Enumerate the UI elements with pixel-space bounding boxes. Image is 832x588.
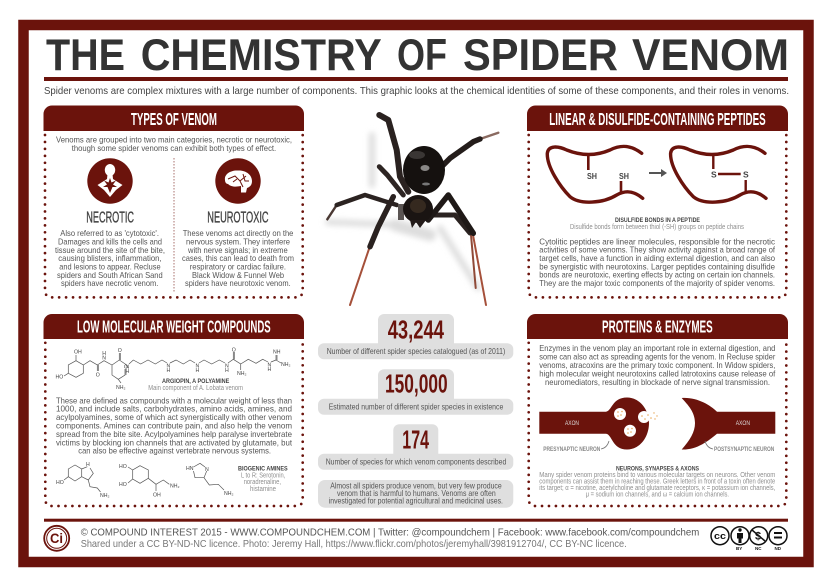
- caption: argiopin: ARGIOPIN, A POLYAMINE: [162, 378, 230, 385]
- callout: venom harm note: investigated for potential agricultural and medicinal uses.: [329, 496, 503, 506]
- credits: © COMPOUND INTEREST 2015 - WWW.COMPOUNDCHEM.COM | Twitter: @compoundchem | Facebook: www.facebook.com/compoundchem: [81, 527, 699, 538]
- necrotic column: causing blisters, inflammation,: [58, 253, 162, 263]
- icon: creative commons badges: ND: [774, 546, 782, 551]
- icon: creative commons badges: BY: [736, 546, 742, 551]
- stat: 43,244: [318, 314, 513, 359]
- neurotoxic column: Black Widow & Funnel Web: [192, 270, 284, 280]
- callout: venom harm note: [318, 480, 513, 508]
- caption: neurons, synapses and axons: [539, 466, 776, 498]
- icon: creative commons badges: $: [755, 530, 761, 542]
- caption: biogenic amines: L to R: Serotonin,: [241, 473, 285, 480]
- body text: low molecular weight: can also be effective against vertebrate nervous systems.: [78, 446, 271, 456]
- neurotoxic column: with nerve signals; in extreme: [187, 245, 288, 255]
- intro text: types: Venoms are grouped into two main categories, necrotic or neurotoxic,: [56, 134, 292, 144]
- neurotoxic column: spiders have neurotoxic venom.: [185, 278, 291, 288]
- chemical structure: histamine: NH₂: [224, 491, 234, 497]
- caption: neurons, synapses and axons: its target; α = nicotine, acetylcholine and glutamate receptors, κ = potassium ion channels,: [539, 485, 775, 492]
- caption: disulfide bonds: [570, 217, 744, 231]
- caption: argiopin: [148, 378, 243, 392]
- body text: proteins: Enzymes in the venom play an important role in external digestion, and: [539, 343, 776, 353]
- diagram: peptide with disulfide bond: [671, 146, 766, 202]
- chemical structure: argiopin: NH₂: [281, 362, 291, 368]
- stat: 174: [318, 424, 513, 470]
- neurotoxic column: respiratory or cardiac failure.: [190, 262, 286, 272]
- chemical structure: argiopin: O: [96, 372, 100, 378]
- diagram: linear peptide with SH groups: SH: [587, 171, 597, 181]
- necrotic column: [55, 210, 165, 288]
- body text: peptides: be synergistic with neurotoxins. Larger peptides containing disulfide: [539, 261, 775, 271]
- panel: low molecular weight compounds: [44, 314, 304, 506]
- necrotic column: tissue around the site of the bite,: [55, 245, 165, 255]
- chemical structure: argiopin: N: [166, 364, 170, 370]
- body text: proteins: [539, 343, 776, 387]
- chemical structure: noradrenaline: [119, 464, 180, 498]
- heading: types of venom: TYPES OF VENOM: [131, 109, 217, 129]
- chemical structure: argiopin: N: [268, 362, 272, 368]
- body text: peptides: Cytolitic peptides are linear molecules, responsible for the necrotic: [539, 236, 776, 246]
- neurotoxic column: NEUROTOXIC: [207, 210, 269, 227]
- icon: creative commons badges: [711, 527, 787, 551]
- body text: low molecular weight: These are defined as compounds with a molecular weight of less than: [56, 395, 292, 405]
- stat: 150,000: [318, 369, 513, 415]
- caption: biogenic amines: [238, 466, 288, 493]
- intro text: types: though some spider venoms can exhibit both types of effect.: [72, 143, 276, 153]
- body text: peptides: bonds are neurotoxic, exerting effects by acting on certain ion channels.: [539, 270, 775, 280]
- body text: low molecular weight: victims by blocking ion channels that are activated by glutamate, but: [56, 437, 293, 447]
- neurotoxic column: [182, 210, 294, 288]
- body text: peptides: They are the major toxic components of the majority of spider venoms.: [539, 278, 775, 288]
- chemical structure: histamine: HN: [186, 466, 194, 472]
- stat: 150,000: Estimated number of different spider species in existence: [329, 402, 504, 411]
- body text: low molecular weight: 1000, and include salts, carbohydrates, amino acids, amines, and: [56, 404, 292, 414]
- caption: neurons, synapses and axons: μ = sodium ion channels, and ω = calcium ion channels.: [586, 492, 729, 498]
- intro text: Spider venoms are complex mixtures with a large number of components. This graphic looks at the chemical identities of some of these components, and their roles in venoms.: [44, 86, 789, 97]
- callout: venom harm note: Almost all spiders produce venom, but very few produce: [330, 482, 502, 490]
- neurotoxic column: nervous system. They interfere: [186, 236, 290, 246]
- diagram: linear peptide with SH groups: [547, 146, 643, 202]
- title: CHEMISTRY: [141, 31, 382, 80]
- stat: 43,244: 43,244: [388, 316, 445, 344]
- chemical structure: serotonin: [56, 462, 110, 499]
- chemical structure: histamine: N: [205, 467, 209, 473]
- body text: low molecular weight: components. Amines can contribute pain, and also help the venom: [56, 421, 292, 431]
- stat: 43,244: Number of different spider species catalogued (as of 2011): [327, 347, 506, 356]
- diagram: presynaptic neuron: [539, 398, 658, 453]
- body text: proteins: high molecular weight neurotoxins called latrotoxins cause release of: [539, 368, 776, 378]
- necrotic column: Also referred to as 'cytotoxic'.: [60, 228, 159, 238]
- caption: biogenic amines: histamine: [250, 486, 276, 493]
- icon: necrotic body: [87, 158, 133, 204]
- chemical structure: serotonin: NH₂: [100, 493, 110, 499]
- icon: Ci logo: Ci: [50, 530, 63, 546]
- callout: venom harm note: venom that is harmful to humans. Venoms are often: [337, 489, 496, 498]
- body text: peptides: activities of some venoms. They show activity against a broad range of: [539, 245, 776, 255]
- chemical structure: argiopin: O: [232, 348, 236, 354]
- chemical structure: argiopin: H: [225, 368, 229, 374]
- diagram: peptide with disulfide bond: S: [743, 170, 749, 180]
- necrotic column: spiders and South African Sand: [57, 270, 163, 280]
- icon: creative commons badges: NC: [755, 546, 762, 551]
- title: SPIDER: [463, 31, 618, 80]
- title: [46, 31, 789, 80]
- caption: neurons, synapses and axons: Many spider venom proteins bind to various molecular targets on neurons. Other venom: [539, 472, 776, 479]
- chemical structure: noradrenaline: HO: [119, 482, 127, 488]
- chemical structure: serotonin: HO: [56, 480, 64, 486]
- credits: [81, 527, 699, 550]
- spider photo: [327, 115, 498, 305]
- chemical structure: noradrenaline: OH: [153, 492, 161, 498]
- diagram: presynaptic neuron: AXON: [565, 421, 579, 427]
- chemical structure: argiopin: N: [225, 364, 229, 370]
- panel: proteins and enzymes: [527, 314, 788, 506]
- body text: low molecular weight: acylpolyamines, some of which act synergistically with other venom: [56, 412, 292, 422]
- caption: neurons, synapses and axons: NEURONS, SYNAPSES & AXONS: [616, 466, 699, 472]
- title: VENOM: [632, 31, 789, 80]
- body text: proteins: venoms, atracoxins are the primary toxic component. In Widow spiders,: [539, 360, 775, 370]
- footer: [44, 519, 788, 551]
- chemical structure: argiopin: N: [126, 364, 130, 370]
- chemical structure: argiopin: H: [166, 368, 170, 374]
- panel: types of venom: [44, 106, 304, 297]
- diagram: peptide with disulfide bond: S: [711, 170, 717, 180]
- stat: 174: 174: [402, 426, 430, 454]
- caption: disulfide bonds: Disulfide bonds form between thiol (-SH) groups on peptide chains: [570, 224, 744, 231]
- diagram: postsynaptic neuron: AXON: [736, 421, 750, 427]
- chemical structure: argiopin: HO: [56, 374, 63, 380]
- chemical structure: argiopin: OH: [74, 350, 82, 356]
- body text: proteins: neuromediators, resulting in blockade of nerve signal transmission.: [545, 377, 770, 387]
- caption: neurons, synapses and axons: components can assist them in reaching these. Greek letters in front of a toxin often denote: [539, 478, 775, 486]
- diagram: postsynaptic neuron: POSTSYNAPTIC NEURON: [714, 446, 775, 453]
- chemical structure: noradrenaline: NH₂: [170, 484, 180, 490]
- chemical structure: argiopin: H: [126, 369, 130, 375]
- chemical structure: argiopin: N: [196, 364, 200, 370]
- chemical structure: argiopin: NH₂: [116, 385, 126, 391]
- icon: creative commons badges: cc: [714, 531, 726, 542]
- caption: biogenic amines: BIOGENIC AMINES: [238, 466, 288, 473]
- chemical structure: argiopin: [56, 348, 291, 391]
- title: OF: [397, 31, 447, 80]
- chemical structure: argiopin: NH: [273, 350, 281, 356]
- diagram: postsynaptic neuron: [682, 398, 775, 453]
- chemical structure: noradrenaline: HO: [119, 464, 127, 470]
- body text: low molecular weight: [56, 395, 293, 456]
- heading: low molecular weight: LOW MOLECULAR WEIGHT COMPOUNDS: [77, 317, 271, 337]
- chemical structure: argiopin: N: [102, 356, 106, 362]
- heading: proteins: PROTEINS & ENZYMES: [602, 317, 713, 337]
- arrow: [649, 169, 667, 177]
- diagram: presynaptic neuron: PRESYNAPTIC NEURON: [543, 446, 601, 453]
- credits: Shared under a CC BY-ND-NC licence. Photo: Jeremy Hall, https://www.flickr.com/photos/jeremyhall/3981912704/, CC BY-NC licence.: [81, 539, 627, 550]
- necrotic column: spiders have necrotic venom.: [61, 278, 158, 288]
- caption: biogenic amines: noradrenaline,: [244, 479, 281, 486]
- icon: Ci logo: [44, 526, 69, 551]
- neurotoxic column: cases, this can lead to death from: [182, 253, 294, 263]
- panel: linear and disulfide peptides: [527, 106, 788, 297]
- necrotic column: Damages and kills the cells and: [58, 236, 162, 246]
- chemical structure: argiopin: O: [118, 348, 122, 354]
- title: THE: [46, 31, 125, 80]
- body text: peptides: [539, 236, 776, 288]
- caption: argiopin: Main component of A. Lobata venom: [148, 385, 243, 392]
- intro text: types: [56, 134, 292, 153]
- icon: brain: [215, 158, 261, 204]
- chemical structure: histamine: [186, 463, 234, 497]
- chemical structure: argiopin: NH₂: [237, 371, 247, 377]
- caption: disulfide bonds: DISULFIDE BONDS IN A PEPTIDE: [615, 217, 700, 224]
- body text: peptides: target cells, have a function in aiding external digestion, and can also: [539, 253, 775, 263]
- stat: 150,000: 150,000: [385, 371, 448, 399]
- body text: proteins: some can also act as spreading agents for the venom. In Recluse spider: [539, 352, 775, 362]
- chemical structure: argiopin: O: [124, 364, 128, 370]
- diagram: linear peptide with SH groups: SH: [619, 171, 629, 181]
- necrotic column: and lesions to appear. Recluse: [59, 262, 161, 272]
- body text: low molecular weight: spread from the bite site. Acylpolyamines help paralyse invertebrate: [56, 429, 292, 439]
- chemical structure: argiopin: H: [102, 351, 106, 357]
- stat: 174: Number of species for which venom components described: [326, 457, 506, 466]
- neurotoxic column: These venoms act directly on the: [183, 228, 294, 238]
- necrotic column: NECROTIC: [86, 210, 134, 227]
- chemical structure: argiopin: H: [196, 368, 200, 374]
- chemical structure: argiopin: H: [268, 367, 272, 373]
- chemical structure: serotonin: H: [86, 462, 90, 468]
